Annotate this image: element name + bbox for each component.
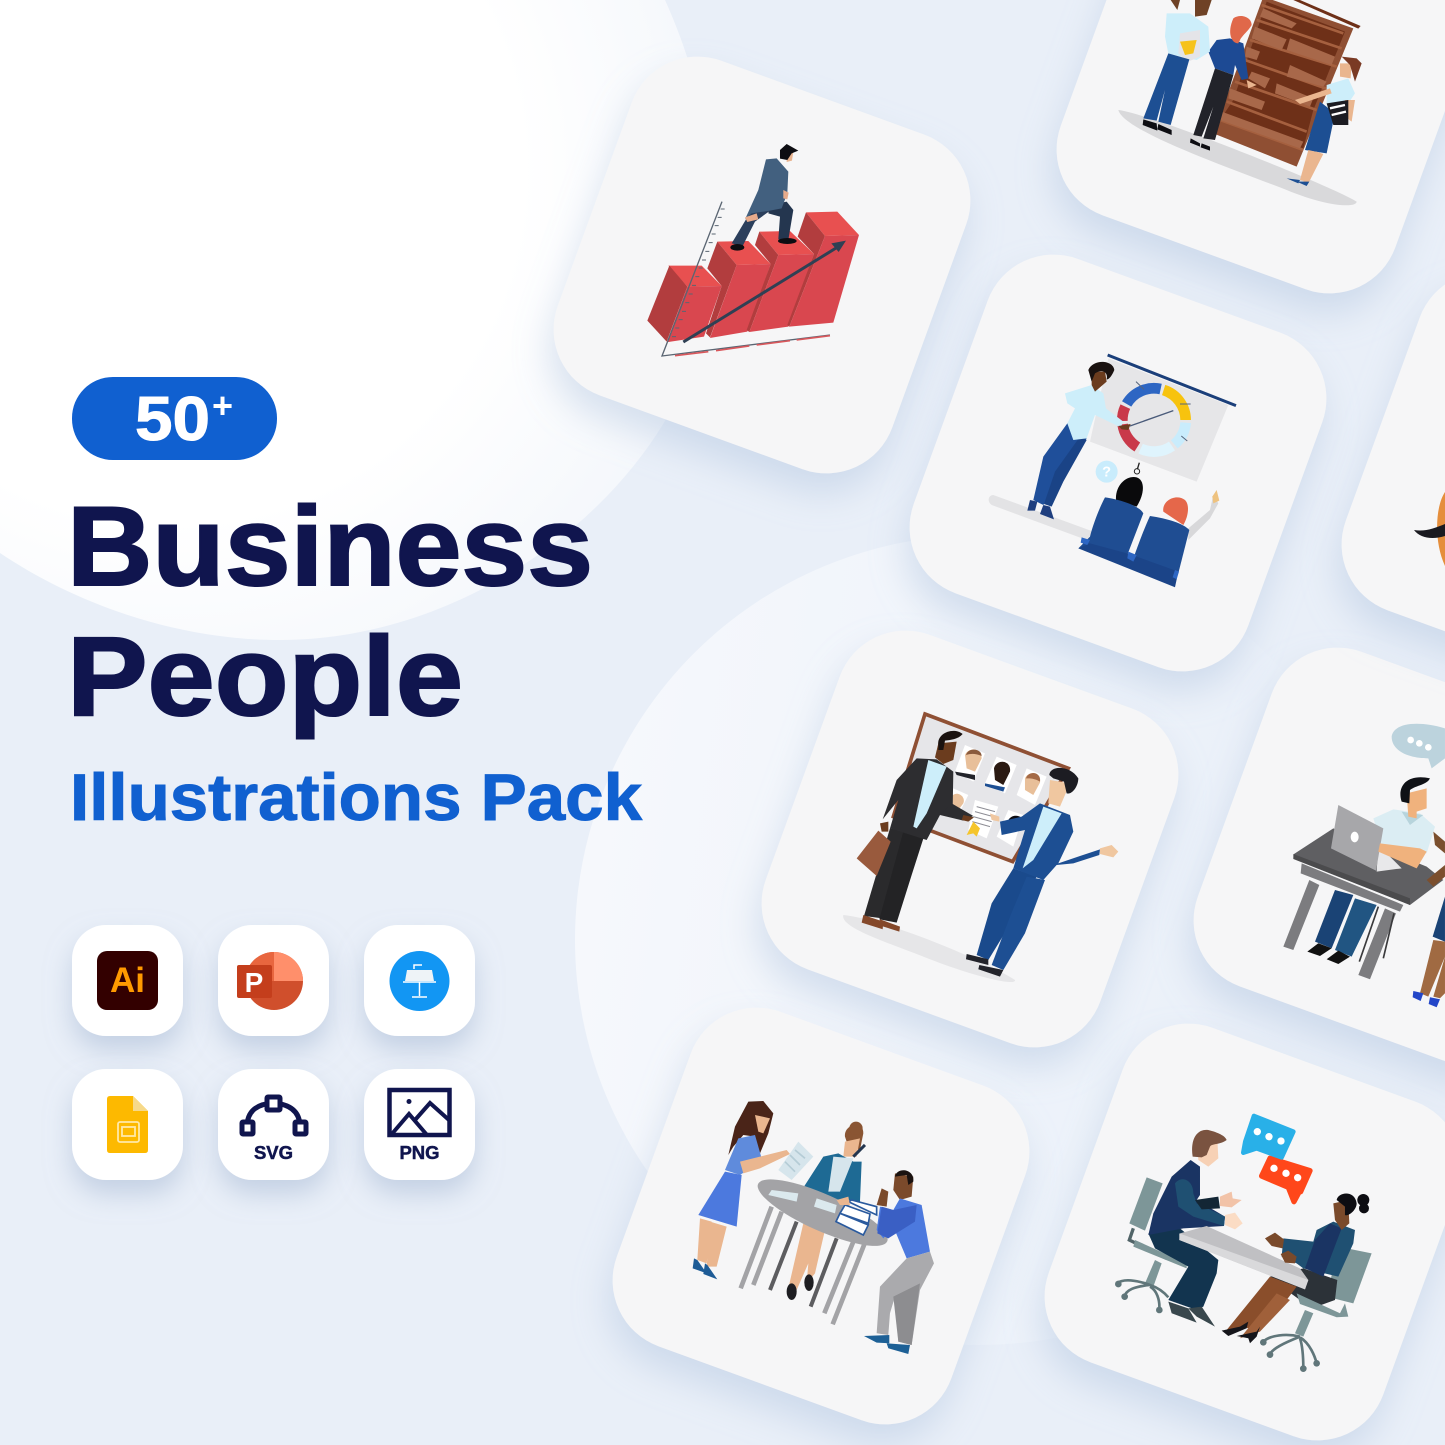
card shape: [890, 235, 1346, 691]
illustration: man at laptop desk: [1283, 724, 1445, 1007]
card shape: [1174, 628, 1445, 1084]
icon: PowerPoint tile: P: [245, 967, 263, 998]
icon: PowerPoint tile: [218, 925, 329, 1036]
subtitle: Illustrations Pack: [70, 760, 642, 834]
card shape: [742, 611, 1198, 1067]
icon: SVG tile: [218, 1069, 329, 1180]
panel: card presentation: [890, 235, 1346, 691]
illustration: partial shoe at edge: [1414, 524, 1445, 538]
panel: card chart climber: [534, 37, 990, 493]
card shape: [1037, 0, 1445, 313]
background glow: top-left shape: [0, 0, 714, 640]
panel: card team board: [742, 611, 1198, 1067]
badge: 50+: [72, 377, 277, 460]
title: Business: [67, 484, 593, 609]
icon: PNG tile: PNG: [399, 1142, 440, 1163]
icon: Google Slides tile: [72, 1069, 183, 1180]
illustration: partial figure at edge: [1437, 492, 1445, 566]
illustration: three colleagues at round table: [693, 1101, 934, 1354]
illustration: man climbing bar chart: [647, 144, 859, 356]
panel: card right edge partial: [1322, 252, 1445, 708]
icon: Keynote tile: [364, 925, 475, 1036]
icon: Adobe Illustrator tile: Ai: [110, 961, 145, 1000]
illustration: two people talking across table: [1115, 1116, 1372, 1372]
icon: Adobe Illustrator tile: [72, 925, 183, 1036]
card shape: [534, 37, 990, 493]
illustration: two men at profile board: [843, 714, 1118, 982]
card shape: [1322, 252, 1445, 708]
panel: card bookshelf team: [1037, 0, 1445, 313]
card shape: [1025, 1004, 1445, 1445]
background glow: large circle: [575, 535, 1385, 1345]
badge plus sign: +: [212, 385, 233, 426]
illustration: colleagues by bookshelf: [1118, 0, 1362, 205]
badge number: 50: [135, 385, 210, 454]
panel: card table meeting: [593, 988, 1049, 1444]
title: People: [67, 614, 463, 739]
title: [67, 484, 593, 739]
illustration: presenter with gauge chart: ?: [1102, 465, 1111, 481]
card shape: [593, 988, 1049, 1444]
icon: PNG tile: [364, 1069, 475, 1180]
icon: SVG tile: SVG: [254, 1142, 293, 1163]
panel: card negotiation: [1025, 1004, 1445, 1445]
panel: card laptop desk: [1174, 628, 1445, 1084]
illustration: presenter with gauge chart: [989, 355, 1236, 587]
